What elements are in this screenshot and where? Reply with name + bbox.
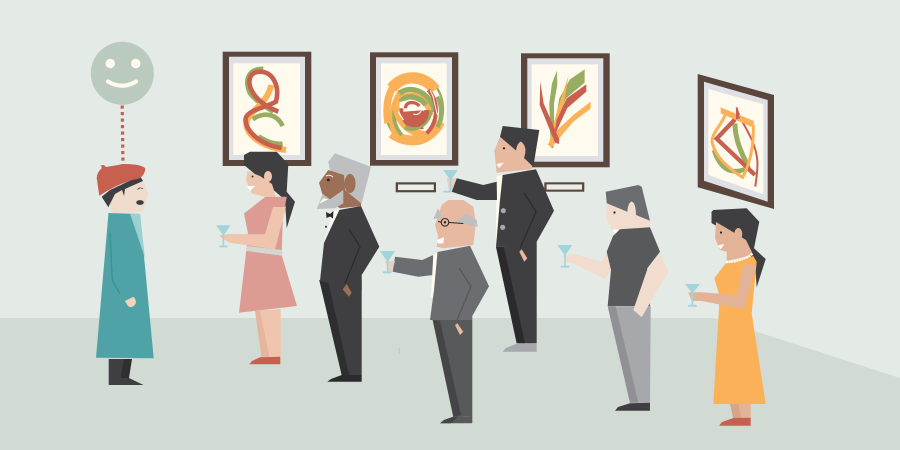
hair	[102, 176, 143, 207]
shoe	[719, 418, 751, 426]
shirt and bow tie	[324, 210, 340, 243]
painting 2: swirl	[370, 52, 458, 166]
jacket	[320, 206, 379, 290]
face and neck	[715, 222, 753, 261]
coat	[96, 213, 154, 358]
person: tall man in black suit	[443, 126, 554, 352]
arm	[688, 265, 756, 309]
trousers	[608, 306, 651, 403]
person: man in beret and teal coat	[96, 164, 154, 385]
shoe	[615, 403, 650, 411]
hair	[328, 153, 371, 203]
hair	[712, 208, 766, 287]
thought balloon: smiley face	[91, 42, 154, 105]
jacket	[430, 246, 489, 320]
painting 1: figure-eight ribbon	[223, 52, 311, 166]
painting 4: angled canvas	[698, 74, 774, 209]
plaque under painting 2	[396, 182, 436, 192]
face	[246, 171, 276, 197]
hair	[500, 126, 539, 167]
hair back	[244, 152, 295, 228]
coat collar	[130, 214, 145, 258]
moustache	[136, 200, 144, 205]
head	[494, 137, 533, 173]
shirt	[431, 253, 438, 297]
beret	[97, 164, 145, 196]
hand and glass	[443, 170, 458, 193]
painting 3: feather strokes	[521, 53, 610, 167]
right arm	[633, 253, 668, 317]
hand	[343, 284, 352, 297]
hand in pocket	[455, 323, 463, 335]
shirt	[496, 175, 502, 247]
boots	[109, 359, 143, 385]
plaque under painting 3	[544, 182, 584, 192]
buttons	[500, 208, 506, 230]
person: bald man with glasses in grey jacket	[380, 200, 489, 423]
person: woman in pink dress	[216, 152, 297, 364]
hand and glass	[380, 251, 395, 273]
head	[606, 204, 650, 232]
t-shirt	[607, 227, 660, 306]
person: woman in orange dress	[685, 208, 766, 426]
jacket	[496, 169, 554, 247]
arm sleeve	[452, 178, 497, 200]
head	[435, 200, 476, 248]
cocktail glass	[557, 245, 572, 268]
head	[108, 181, 148, 213]
beard	[317, 190, 343, 209]
glasses	[438, 218, 463, 226]
hair	[606, 185, 650, 221]
trousers	[433, 320, 472, 417]
hand	[125, 297, 136, 307]
face	[319, 170, 361, 208]
floor	[0, 318, 900, 450]
belt	[246, 246, 282, 256]
person: older man in tuxedo	[317, 153, 379, 382]
dress	[239, 197, 297, 313]
shoe	[327, 375, 362, 382]
person: man in grey t-shirt	[557, 185, 668, 411]
left arm and hand	[563, 253, 611, 279]
side hair	[433, 208, 478, 227]
trousers	[319, 280, 362, 375]
dotted line from smiley to visitor	[121, 106, 125, 165]
hand in pocket	[519, 249, 527, 262]
shoe	[249, 357, 280, 364]
cocktail glass	[685, 284, 700, 307]
arm	[220, 207, 286, 249]
shoe	[503, 343, 537, 352]
legs	[730, 404, 751, 418]
sleeve	[393, 255, 433, 277]
cocktail glass	[216, 225, 231, 247]
legs	[255, 309, 281, 358]
dress	[713, 256, 766, 404]
trousers	[496, 246, 537, 343]
shoe	[440, 416, 472, 423]
stray speck	[399, 348, 400, 354]
necklace	[726, 254, 752, 262]
